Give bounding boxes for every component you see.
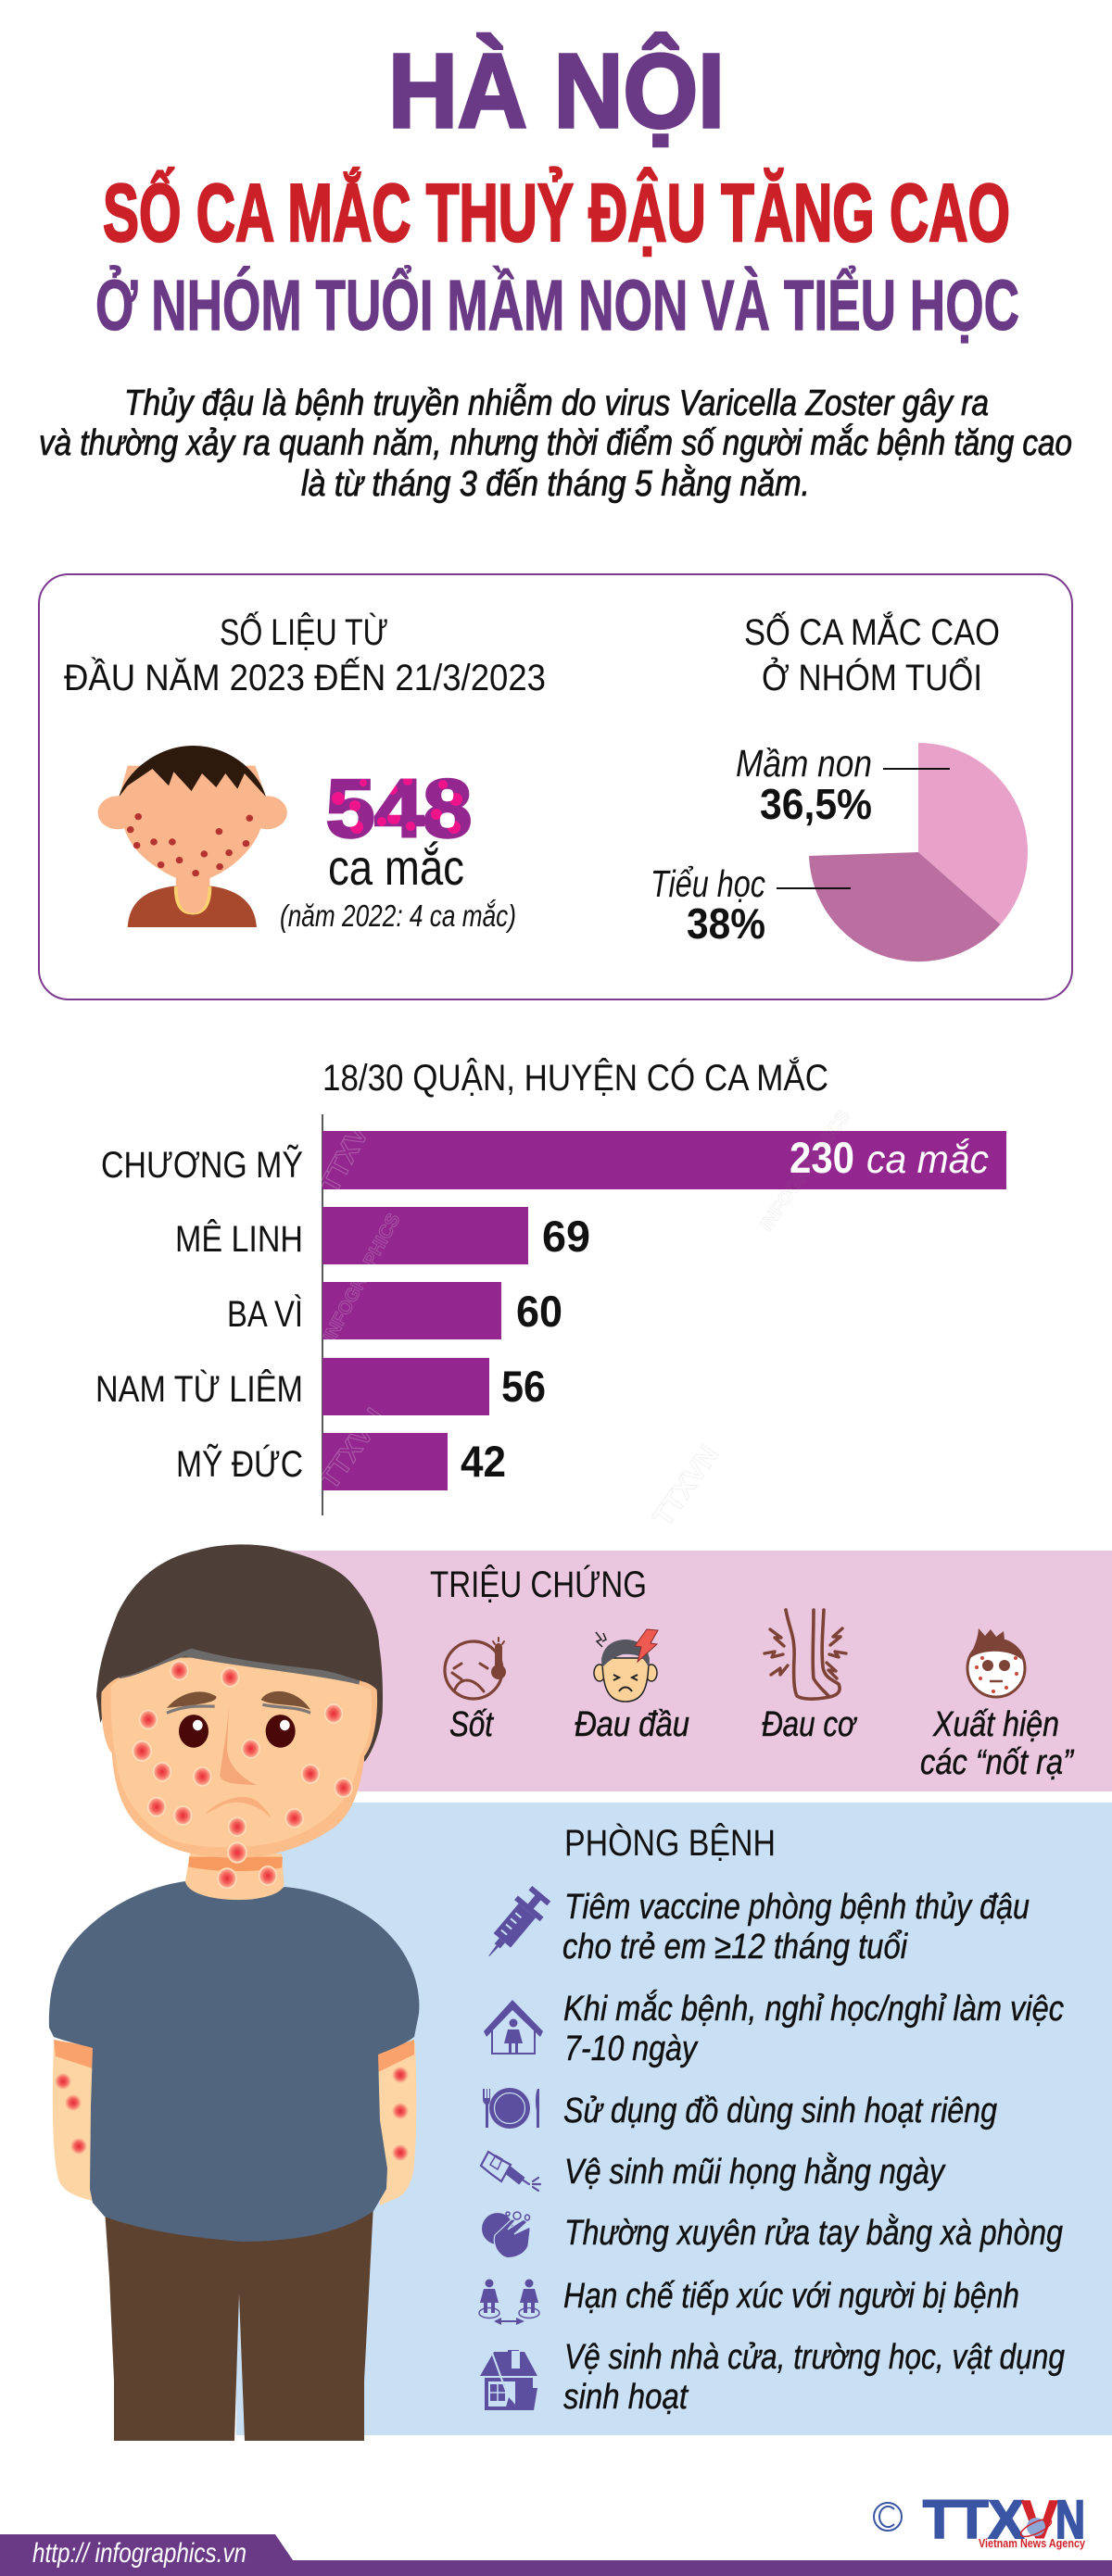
- label: rash: các “nốt rạ”: [920, 1743, 1075, 1782]
- logo: TTXVN: V: [1021, 2490, 1058, 2550]
- icon: fever: [445, 1638, 506, 1699]
- heading: data period: ĐẦU NĂM 2023 ĐẾN 21/3/2023: [64, 656, 546, 698]
- bar: Chương Mỹ: ca mắc: [866, 1137, 989, 1182]
- pie chart: age groups: [809, 743, 1028, 961]
- icon: headache: [594, 1629, 658, 1702]
- logo: TTXVN: N: [1055, 2490, 1085, 2550]
- pie label: preschool: Mầm non: [736, 742, 872, 785]
- icon: muscle ache: [764, 1610, 846, 1699]
- icon: handwashing: [482, 2212, 530, 2258]
- bar: Nam Từ Liêm: NAM TỪ LIÊM: [95, 1368, 303, 1410]
- t-shirt: [49, 1881, 419, 2242]
- logo: TTXVN: TTX: [923, 2490, 1024, 2550]
- head and face: [96, 1544, 383, 1900]
- label: rash: [920, 1705, 1075, 1782]
- bar chart: districts: [95, 1056, 1006, 1515]
- heading: prevention: PHÒNG BỆNH: [564, 1822, 776, 1864]
- item: personal items: Sử dụng đồ dùng sinh hoạt riêng: [563, 2092, 997, 2130]
- note: 2022 comparison: (năm 2022: 4 ca mắc): [280, 898, 516, 933]
- pie label: primary school: 38%: [687, 899, 765, 948]
- pie label: preschool: 36,5%: [760, 780, 872, 828]
- bar: Nam Từ Liêm: [95, 1358, 546, 1415]
- bar: Mỹ Đức: 42: [461, 1437, 506, 1486]
- heading: age group: [744, 610, 1000, 698]
- item: stay home: [563, 1989, 1064, 2068]
- item: vaccine: cho trẻ em ≥12 tháng tuổi: [562, 1928, 908, 1967]
- bar: Mỹ Đức: MỸ ĐỨC: [176, 1443, 303, 1485]
- arms: [53, 2040, 416, 2205]
- heading: age group: Ở NHÓM TUỔI: [762, 655, 982, 698]
- text: INFOGRAPHICS: [756, 1107, 854, 1235]
- item: stay home: 7-10 ngày: [564, 2029, 699, 2068]
- text: TTXVN: [314, 1403, 391, 1495]
- item: vaccine: Tiêm vaccine phòng bệnh thủy đậu: [564, 1888, 1030, 1927]
- bar: Ba Vì: BA VÌ: [227, 1293, 303, 1335]
- number: 548 cases: 548: [326, 762, 472, 854]
- text: TTXVN: [648, 1440, 725, 1532]
- label: fever: Sốt: [449, 1705, 494, 1744]
- icon: plate and cutlery: [483, 2088, 539, 2129]
- label: rash: Xuất hiện: [932, 1705, 1059, 1744]
- chart title: 18/30 QUẬN, HUYỆN CÓ CA MẮC: [322, 1056, 828, 1099]
- icon: keep distance: [479, 2279, 539, 2325]
- bar: Ba Vì: 60: [516, 1287, 562, 1336]
- logo: TTXVN: [923, 2490, 1085, 2550]
- icon: child with chickenpox: [98, 746, 287, 927]
- text: INFOGRAPHICS: [320, 1211, 404, 1345]
- bar: Chương Mỹ: 230: [790, 1133, 854, 1182]
- trousers: [105, 2205, 373, 2441]
- bar: Chương Mỹ: CHƯƠNG MỸ: [101, 1144, 303, 1186]
- bar: Mê Linh: MÊ LINH: [175, 1218, 303, 1260]
- intro paragraph: Thủy đậu là bệnh truyền nhiễm do virus Varicella Zoster gây ra: [124, 383, 989, 423]
- panel: symptoms: [278, 1551, 1112, 1791]
- pie label: preschool: [736, 742, 950, 828]
- icon: clean house: [480, 2350, 537, 2410]
- heading: age group: SỐ CA MẮC CAO: [744, 610, 1000, 653]
- bar: Chương Mỹ: [101, 1131, 1006, 1189]
- item: limit contact: Hạn chế tiếp xúc với người bị bệnh: [563, 2277, 1019, 2316]
- label: ca mắc: ca mắc: [328, 840, 464, 896]
- item: clean surroundings: sinh hoạt: [563, 2378, 689, 2417]
- label: muscle ache: Đau cơ: [762, 1705, 857, 1744]
- panel: prevention: [236, 1803, 1112, 2435]
- heading: data period: [64, 610, 546, 698]
- label: headache: Đau đầu: [575, 1705, 689, 1744]
- footer url: http:// infographics.vn: [32, 2538, 246, 2569]
- icon: rash face: [967, 1628, 1025, 1697]
- bar: Nam Từ Liêm: 56: [501, 1362, 546, 1411]
- item: nose and throat: Vệ sinh mũi họng hằng ngày: [564, 2152, 946, 2192]
- bar: Mê Linh: 69: [542, 1212, 590, 1261]
- intro paragraph: [39, 383, 1072, 504]
- bar: Ba Vì: [227, 1282, 562, 1339]
- logo: copyright symbol: [874, 2503, 902, 2531]
- icon: stay at home: [484, 2000, 543, 2054]
- item: vaccine: [562, 1888, 1030, 1967]
- icon: syringe: [476, 1883, 554, 1967]
- pie label: primary school: Tiểu học: [651, 862, 765, 905]
- footer bar: [0, 2534, 1112, 2576]
- pie label: primary school: [651, 862, 851, 948]
- bar: Mỹ Đức: [176, 1433, 506, 1490]
- text: TTXVN: [314, 1103, 384, 1198]
- bar: Mê Linh: [175, 1207, 590, 1264]
- heading: data period: SỐ LIỆU TỪ: [220, 610, 388, 653]
- heading: symptoms: TRIỆU CHỨNG: [430, 1564, 647, 1605]
- icon: nasal spray: [481, 2152, 540, 2191]
- panel: statistics: [39, 574, 1072, 999]
- logo: TTXVN: Vietnam News Agency: [979, 2537, 1085, 2550]
- illustration: person with chickenpox: [49, 1544, 419, 2441]
- intro paragraph: là từ tháng 3 đến tháng 5 hằng năm.: [301, 464, 810, 504]
- axis line: [322, 1114, 323, 1515]
- title: Hà Nội: HÀ NỘI: [388, 32, 725, 149]
- item: clean surroundings: [563, 2338, 1065, 2417]
